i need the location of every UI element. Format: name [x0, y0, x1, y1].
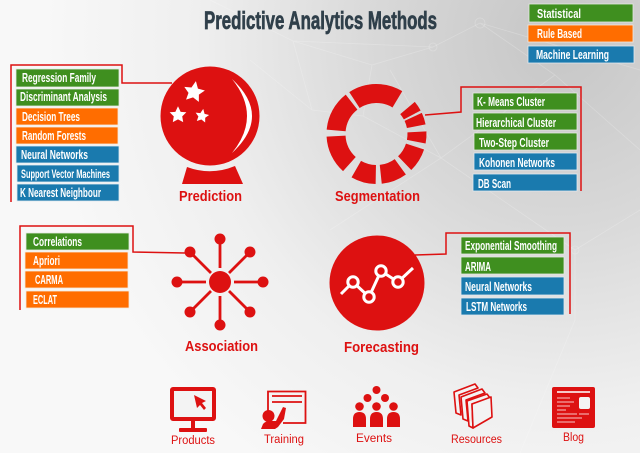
panel: segmentation methods list	[425, 87, 581, 191]
icon: segmented ring	[319, 77, 434, 191]
panel: segmentation methods list: DB Scan	[478, 176, 511, 191]
panel: prediction methods list	[11, 65, 172, 202]
panel: segmentation methods list: Kohonen Networks	[479, 155, 555, 170]
legend	[528, 4, 634, 63]
label: forecasting: Forecasting	[344, 339, 419, 356]
icon: association network	[172, 234, 268, 330]
panel: forecasting methods list	[415, 233, 570, 315]
label: prediction: Prediction	[179, 188, 242, 205]
panel: segmentation methods list: K- Means Cluster	[477, 94, 545, 109]
icon: products monitor	[172, 389, 214, 432]
panel: forecasting methods list: ARIMA	[465, 259, 491, 274]
label: products: Products	[171, 435, 215, 447]
panel: association methods list	[20, 226, 185, 310]
icon: forecasting line chart	[330, 236, 424, 330]
panel: segmentation methods list: Two-Step Cluster	[479, 135, 549, 150]
panel: prediction methods list: Decision Trees	[22, 109, 80, 124]
panel: association methods list: Correlations	[33, 234, 82, 249]
panel: prediction methods list: Support Vector Machines	[21, 167, 110, 181]
panel: prediction methods list: Regression Family	[22, 70, 96, 85]
legend: Statistical	[537, 6, 581, 21]
icon: events audience	[353, 386, 400, 427]
label: events: Events	[356, 433, 392, 445]
label: association: Association	[185, 338, 258, 355]
icon: blog page	[552, 387, 595, 428]
panel: association methods list: CARMA	[35, 272, 63, 287]
panel: prediction methods list: Discriminant Analysis	[20, 89, 107, 104]
label: training: Training	[264, 434, 304, 446]
panel: forecasting methods list: LSTM Networks	[466, 299, 527, 314]
label: resources: Resources	[451, 434, 502, 446]
panel: prediction methods list: Random Forests	[22, 128, 86, 143]
title: Predictive Analytics Methods	[204, 7, 437, 35]
panel: association methods list: Apriori	[33, 253, 60, 268]
panel: forecasting methods list: Exponential Smoothing	[465, 238, 557, 253]
panel: association methods list: ECLAT	[33, 292, 57, 307]
icon: resources books	[454, 384, 492, 428]
panel: prediction methods list: Neural Networks	[21, 147, 88, 162]
icon: crystal ball	[160, 66, 260, 184]
panel: prediction methods list: K Nearest Neighbour	[20, 185, 101, 200]
icon: training presenter	[261, 392, 306, 429]
label: blog: Blog	[563, 432, 584, 444]
panel: forecasting methods list: Neural Networks	[465, 279, 532, 294]
panel: segmentation methods list: Hierarchical Cluster	[476, 115, 556, 130]
legend: Rule Based	[537, 26, 582, 41]
label: segmentation: Segmentation	[335, 188, 420, 205]
